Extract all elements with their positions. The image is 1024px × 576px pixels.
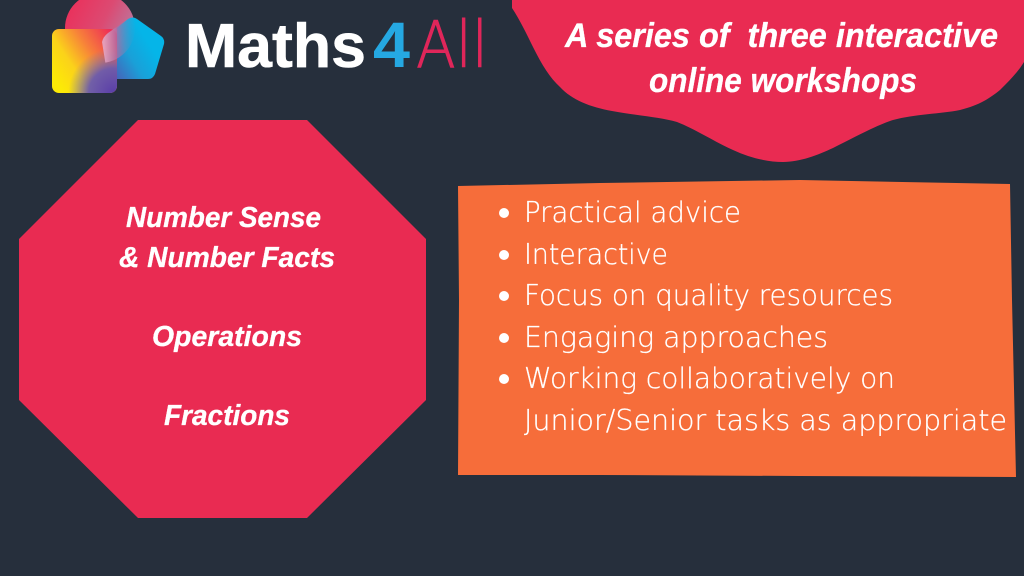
topic: number sense: Number Sense xyxy=(126,202,321,234)
wordmark: Maths xyxy=(185,12,366,81)
bullet: working collaboratively xyxy=(499,362,1007,437)
heading line 1: A series of three interactive xyxy=(564,17,998,55)
panel: header blob xyxy=(512,0,1024,162)
wordmark: 4 xyxy=(373,9,410,81)
heading line 2: online workshops xyxy=(649,62,917,100)
bullet: practical advice: Practical advice xyxy=(524,196,741,229)
bullet: interactive: Interactive xyxy=(524,238,668,271)
logo: Maths4All xyxy=(52,0,488,93)
panel: orange feature list xyxy=(458,180,1016,477)
bullet: working collaboratively: Working collaboratively on xyxy=(524,362,895,395)
bullet: engaging approaches: Engaging approaches xyxy=(524,321,828,354)
wordmark xyxy=(185,9,488,83)
icon: overlapping shapes xyxy=(52,0,164,93)
topic: number facts: & Number Facts xyxy=(119,242,335,274)
topic: fractions: Fractions xyxy=(164,400,290,432)
wordmark: All xyxy=(416,9,488,83)
topic: operations: Operations xyxy=(152,321,302,353)
panel: octagon topics xyxy=(19,120,426,518)
bullet: quality resources: Focus on quality resources xyxy=(524,279,893,312)
bullet: working collaboratively: Junior/Senior tasks as appropriate xyxy=(524,404,1007,437)
